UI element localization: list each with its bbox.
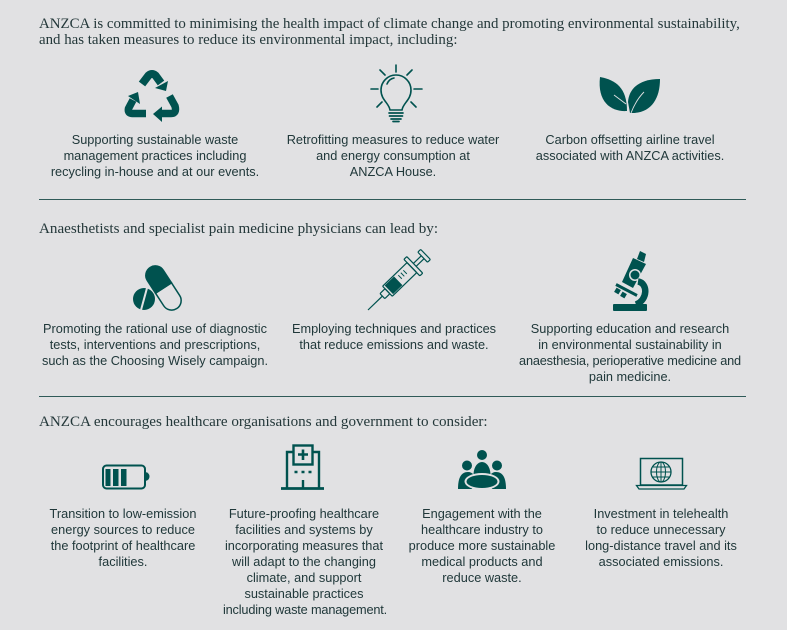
text: rational use <box>42 321 268 368</box>
text: education and research: pain medicine. <box>589 369 671 384</box>
text: rational use: Promoting the rational use of diagnostic <box>43 321 267 336</box>
text: rational use: such as the Choosing Wisely campaign. <box>42 353 268 368</box>
text: retrofitting: and energy consumption at <box>316 148 470 163</box>
text: future-proofing: facilities and systems by <box>235 522 373 537</box>
text: low-emission energy: energy sources to reduce <box>51 522 195 537</box>
text: techniques: that reduce emissions and waste. <box>299 337 489 352</box>
text: low-emission energy: facilities. <box>99 554 147 569</box>
icon: microscope <box>613 251 647 311</box>
icon: people around table <box>458 450 506 490</box>
text: low-emission energy: the footprint of healthcare <box>51 538 195 553</box>
text: engagement <box>409 506 555 585</box>
text: engagement: Engagement with the <box>422 506 542 521</box>
icon: laptop globe <box>636 458 686 489</box>
text: telehealth: Investment in telehealth <box>594 506 728 521</box>
icon: syringe <box>360 246 434 318</box>
text: education and research: in environmental sustainability in <box>538 337 722 352</box>
text: low-emission energy: Transition to low-emission <box>50 506 196 521</box>
text: retrofitting: Retrofitting measures to reduce water <box>287 132 499 147</box>
heading: healthcare organisations: ANZCA encourages healthcare organisations and government to consider: <box>39 414 488 430</box>
text: telehealth: associated emissions. <box>599 554 723 569</box>
text: telehealth: long-distance travel and its <box>585 538 737 553</box>
text: carbon offsetting: Carbon offsetting airline travel <box>545 132 715 147</box>
text: education and research <box>519 321 741 384</box>
icon: light bulb <box>371 65 422 122</box>
heading: anaesthetists lead: Anaesthetists and specialist pain medicine physicians can lead by: <box>39 221 438 237</box>
heading: ANZCA commitment: ANZCA is committed to minimising the health impact of climate change and promoting environmental sustainability, <box>39 16 740 32</box>
icon: recycle <box>128 74 176 122</box>
text: retrofitting <box>287 132 500 179</box>
text: future-proofing: will adapt to the changing <box>232 554 376 569</box>
heading: ANZCA commitment: and has taken measures to reduce its environmental impact, including: <box>39 32 457 48</box>
text: techniques: Employing techniques and practices <box>292 321 496 336</box>
text: telehealth: to reduce unnecessary <box>596 522 725 537</box>
text: retrofitting: ANZCA House. <box>350 164 436 179</box>
icon: pills <box>133 262 185 314</box>
text: engagement: healthcare industry to <box>421 522 543 537</box>
icon: hospital <box>281 446 324 488</box>
text: carbon offsetting: associated with ANZCA activities. <box>536 148 724 163</box>
text: waste management <box>51 132 259 179</box>
text: future-proofing: Future-proofing healthcare <box>229 506 379 521</box>
text: techniques <box>292 321 496 352</box>
text: engagement: produce more sustainable <box>409 538 555 553</box>
text: future-proofing: sustainable practices <box>244 586 364 601</box>
icon: battery <box>103 466 150 488</box>
text: education and research: Supporting education and research <box>531 321 729 336</box>
icon: leaves <box>600 77 660 113</box>
text: future-proofing: climate, and support <box>247 570 361 585</box>
text: waste management: recycling in-house and at our events. <box>51 164 259 179</box>
text: carbon offsetting <box>536 132 724 163</box>
text: future-proofing: incorporating measures that <box>225 538 383 553</box>
text: future-proofing <box>223 506 387 617</box>
text: engagement: reduce waste. <box>442 570 522 585</box>
text: waste management: Supporting sustainable waste <box>72 132 238 147</box>
text: future-proofing: including waste management. <box>223 602 387 617</box>
text: low-emission energy <box>50 506 196 569</box>
heading: ANZCA commitment <box>39 16 740 48</box>
text: education and research: anaesthesia, perioperative medicine and <box>519 353 741 368</box>
text: waste management: management practices including <box>64 148 246 163</box>
text: telehealth <box>585 506 737 569</box>
text: rational use: tests, interventions and prescriptions, <box>50 337 260 352</box>
text: engagement: medical products and <box>421 554 543 569</box>
